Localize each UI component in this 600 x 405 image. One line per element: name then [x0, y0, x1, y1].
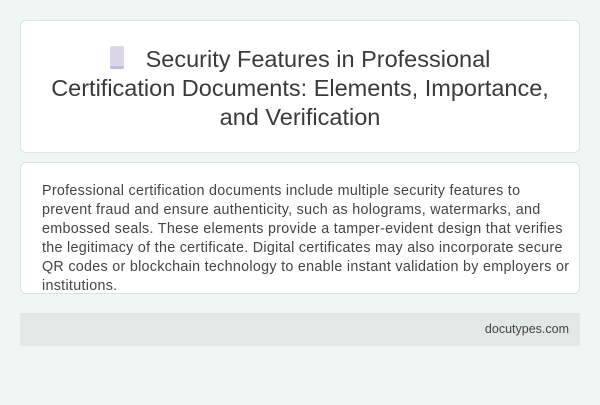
text block: description: prevent fraud and ensure authenticity, such as holograms, watermarks, and: [42, 202, 540, 218]
footer bar: docutypes.com: [485, 322, 569, 336]
text block: description: embossed seals. These elements provide a tamper-evident design that verifies: [42, 221, 563, 237]
title: [51, 46, 549, 130]
text block: description: Professional certification documents include multiple security features to: [42, 183, 520, 199]
title: Security Features in Professional: [146, 46, 490, 72]
panel: description card: [20, 162, 580, 294]
text block: description: [42, 183, 569, 294]
text block: description: QR codes or blockchain technology to enable instant validation by employers or: [42, 259, 569, 275]
icon: document: [110, 46, 124, 69]
title: Certification Documents: Elements, Importance,: [51, 75, 549, 101]
footer bar: [20, 313, 580, 346]
text block: description: the legitimacy of the certificate. Digital certificates may also incorporate secure: [42, 240, 563, 256]
panel: title card: [20, 20, 580, 153]
title: and Verification: [220, 104, 380, 130]
text block: description: institutions.: [42, 278, 117, 294]
